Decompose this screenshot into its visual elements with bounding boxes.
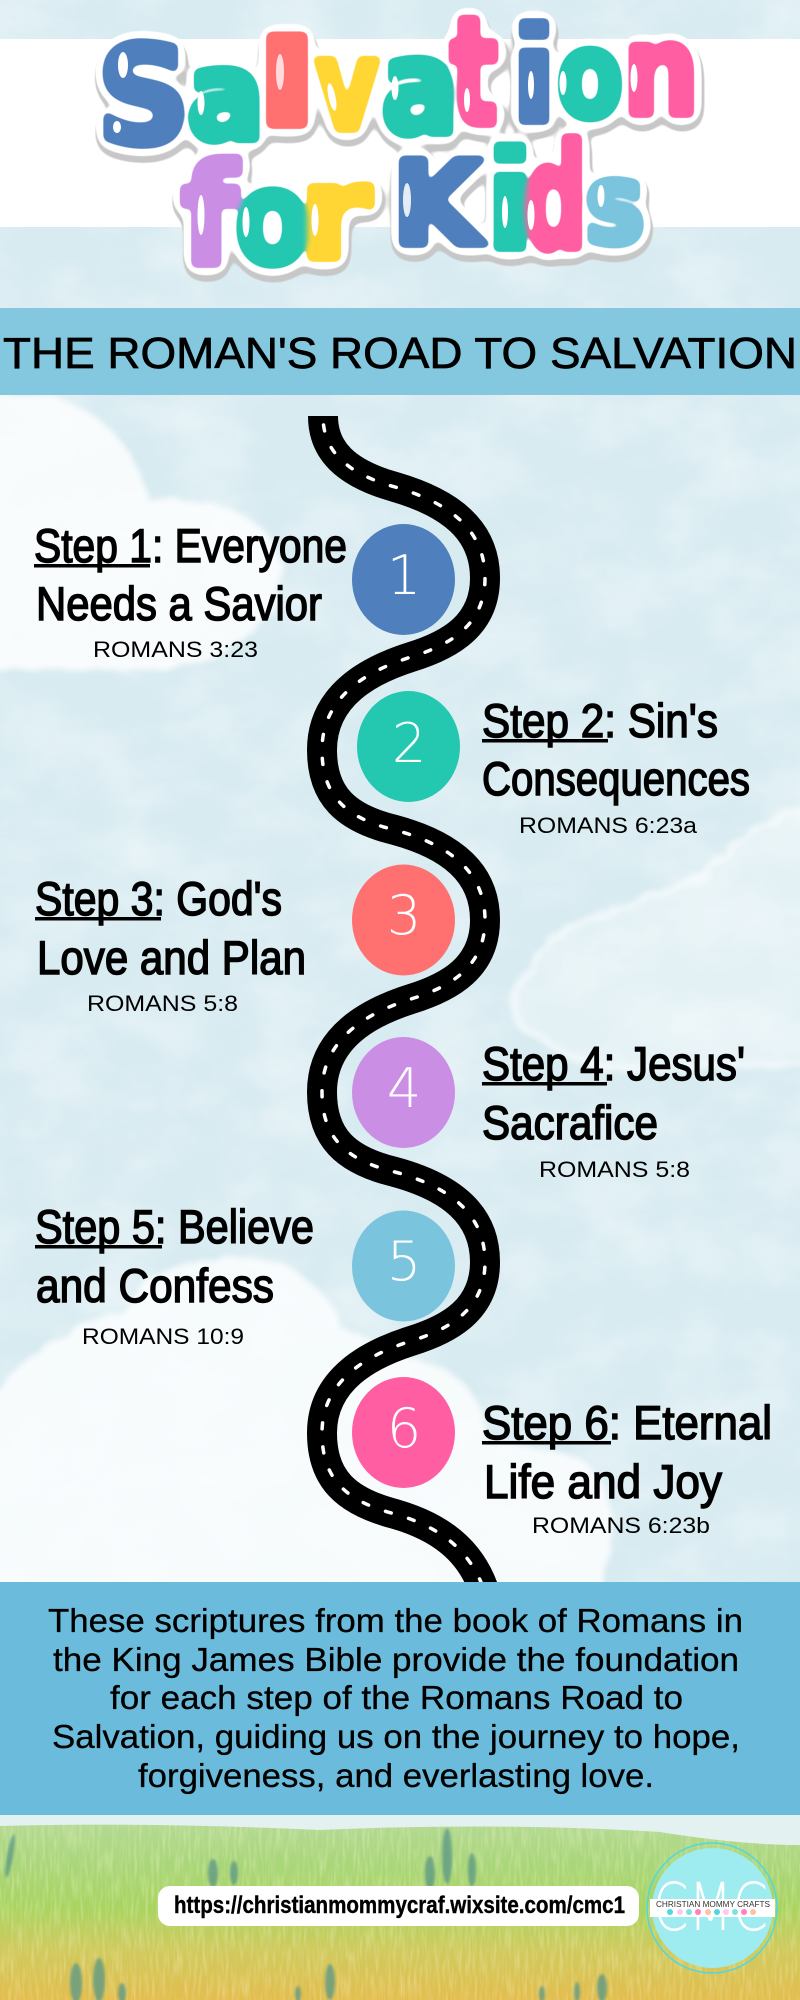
step 4 [352,1037,745,1182]
step 1 text: ROMANS 3:23 [93,637,258,662]
title: Salvation for Kids: r [299,137,371,289]
grass tufts [3,1828,607,2000]
step 1 circle [352,524,455,635]
step 3 circle [352,864,455,976]
website link pill [158,1886,639,1926]
title: Salvation for Kids: v [315,11,379,159]
title: Salvation for Kids: f [181,135,240,298]
step 5 [35,1200,455,1349]
title: Salvation for Kids: K [392,137,486,272]
title: Salvation for Kids: a [187,22,265,169]
logo: Christian Mommy Crafts: CHRISTIAN MOMMY CRAFTS [656,1900,770,1909]
step 6 text: Step 6: Eternal [482,1396,772,1449]
title: Salvation for Kids: s [585,140,645,270]
title: Salvation for Kids: n [623,0,699,144]
step 3 text: ROMANS 5:8 [87,991,238,1016]
step 4 text: Step 4: Jesus' [482,1037,745,1090]
step 4 text: ROMANS 5:8 [539,1157,690,1182]
title: Salvation for Kids: d [523,113,587,283]
step 2 [357,691,750,838]
step 1 circle: 1 [387,544,421,607]
website link pill: https://christianmommycraf.wixsite.com/cmc1 [174,1892,625,1919]
title: Salvation for Kids [97,0,699,298]
logo: Christian Mommy Crafts [647,1843,777,1973]
step 6 circle: 6 [387,1397,421,1460]
step 5 text: Step 5: Believe [35,1200,314,1253]
step 6 circle [352,1377,455,1488]
step 6 text [482,1396,772,1538]
step 6 text: ROMANS 6:23b [532,1513,710,1538]
step 4 circle: 4 [387,1057,421,1120]
step 2 circle [357,691,460,802]
closing message text [48,1602,743,1794]
closing message panel [0,1582,800,1815]
closing message text: the King James Bible provide the foundation [53,1641,739,1678]
closing message text: for each step of the Romans Road to [110,1679,683,1716]
step 1 text [34,519,347,662]
step 1 text: Needs a Savior [36,577,322,630]
step 2 text: Consequences [482,752,750,805]
step 3 [35,864,455,1016]
step 2 text [482,694,750,838]
closing message text: Salvation, guiding us on the journey to hope, [52,1718,740,1755]
step 4 text [482,1037,745,1182]
clouds [0,395,800,1590]
step 2 text: Step 2: Sin's [482,694,718,747]
title: Salvation for Kids: i [506,0,562,157]
white title band [0,39,800,227]
step 1 [34,519,455,662]
winding road [322,416,485,1590]
step 5 circle [352,1210,455,1322]
title: Salvation for Kids: a [381,11,459,165]
step 3 text: Love and Plan [37,931,306,984]
grass field [0,1815,800,2000]
subtitle banner: THE ROMAN'S ROAD TO SALVATION [3,329,797,378]
title: Salvation for Kids: S [97,18,190,176]
step 6 text: Life and Joy [484,1455,722,1508]
step 6 [352,1377,772,1538]
step 2 circle: 2 [392,712,426,775]
step 5 text: and Confess [36,1259,274,1312]
step 3 text: Step 3: God's [35,872,282,925]
closing message text: forgiveness, and everlasting love. [138,1757,654,1794]
step 3 text [35,872,306,1016]
step 5 text: ROMANS 10:9 [82,1324,244,1349]
title: Salvation for Kids: o [235,142,310,294]
step 2 text: ROMANS 6:23a [519,813,698,838]
title: Salvation for Kids: i [480,118,540,285]
title: Salvation for Kids: l [257,15,317,153]
title letter highlights [113,52,638,237]
closing message text: These scriptures from the book of Romans in [48,1602,743,1639]
step 4 circle [352,1037,455,1148]
step 3 circle: 3 [387,884,421,947]
subtitle banner [0,308,800,395]
step 5 text [35,1200,314,1349]
step 1 text: Step 1: Everyone [34,519,347,572]
step 5 circle: 5 [387,1230,421,1293]
title: Salvation for Kids: o [557,7,623,146]
logo: Christian Mommy Crafts: CMC [653,1869,768,1946]
step 4 text: Sacrafice [482,1096,658,1149]
